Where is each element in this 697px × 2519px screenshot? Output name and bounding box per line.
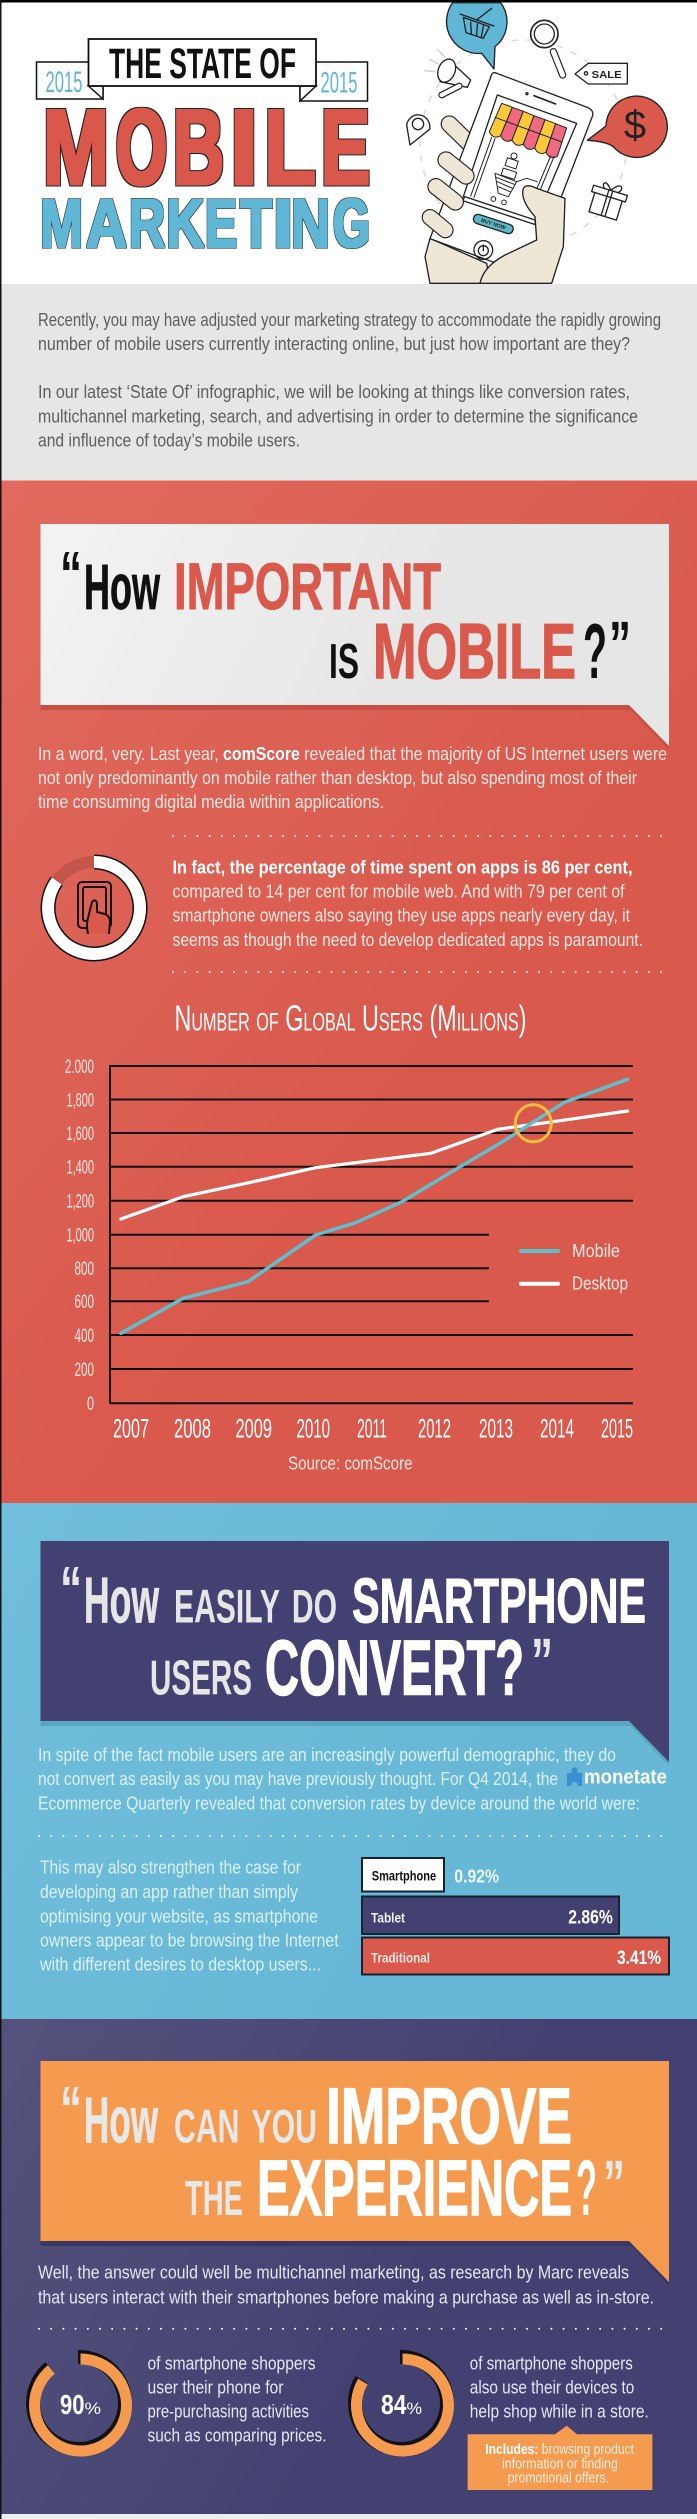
text: app case paragraph: developing an app rather than simply xyxy=(40,1882,298,1902)
illustration: hand holding phone with shopping icons xyxy=(407,3,667,283)
icon: gift box xyxy=(586,179,629,221)
title: Mobile: B xyxy=(173,87,224,207)
title: Mobile: L xyxy=(264,87,316,207)
panel: intro xyxy=(0,284,697,480)
heading card: how important is mobile xyxy=(40,524,669,750)
heading card: improve the experience: How xyxy=(84,2084,158,2157)
icon: dollar speech bubble xyxy=(587,96,667,157)
heading card: improve the experience: ” xyxy=(603,2147,625,2219)
title ribbon: 2015 xyxy=(46,66,82,99)
stat ring: 90% xyxy=(33,2357,127,2451)
text: multichannel paragraph: Well, the answer could well be multichannel marketing, as research by Marc reveals xyxy=(38,2263,629,2283)
logo: monetate: monetate xyxy=(584,1766,667,1788)
y axis labels: 1,600 xyxy=(66,1124,94,1145)
title: Mobile: M xyxy=(43,87,109,207)
icon: megaphone xyxy=(425,49,471,95)
panel: how important is mobile xyxy=(0,480,697,1503)
heading card: smartphone users convert: USERS xyxy=(150,1652,252,1706)
x axis labels: 2008 xyxy=(174,1414,211,1444)
bar: traditional: 3.41% xyxy=(617,1948,661,1969)
line chart: global users xyxy=(65,1057,633,1474)
x axis labels: 2010 xyxy=(296,1414,330,1444)
title: Marketing: M xyxy=(40,185,83,262)
y axis labels: 1,200 xyxy=(66,1192,94,1212)
title: Marketing: K xyxy=(166,185,204,262)
bar: smartphone xyxy=(362,1858,499,1892)
title: Marketing: A xyxy=(86,185,127,262)
legend xyxy=(521,1241,628,1294)
text: 90% description: pre-purchasing activities xyxy=(148,2401,309,2421)
bar: smartphone: Smartphone xyxy=(372,1868,436,1884)
heading card: improve the experience: “ xyxy=(60,2073,82,2145)
heading card: smartphone users convert xyxy=(40,1541,669,1766)
text: 84% description: of smartphone shoppers xyxy=(470,2353,633,2373)
text: intro paragraph 2 xyxy=(38,382,638,450)
y axis labels: 400 xyxy=(74,1326,94,1347)
text: 90% description: such as comparing prices. xyxy=(148,2426,326,2446)
text: 90% description xyxy=(148,2353,326,2446)
callout: includes xyxy=(468,2426,652,2490)
text: app case paragraph: with different desires to desktop users... xyxy=(39,1955,321,1975)
illustration: phone xyxy=(430,73,593,276)
text: conversion paragraph: not convert as easily as you may have previously thought. For Q4 2014, the xyxy=(38,1769,558,1789)
icon: shopping cart with gifts xyxy=(491,153,537,205)
heading card: smartphone users convert: CONVERT? xyxy=(265,1624,524,1712)
text: comScore paragraph: In a word, very. Last year, comScore revealed that the majority of US Internet users were xyxy=(38,744,667,764)
stat ring: 84%: 84% xyxy=(381,2389,422,2420)
text: intro paragraph 1: number of mobile users currently interacting online, but just how important are they? xyxy=(38,334,630,354)
heading card: smartphone users convert: ” xyxy=(531,1625,553,1697)
heading card: improve the experience: THE xyxy=(185,2172,243,2226)
title: Marketing: T xyxy=(240,185,272,262)
icon: sale tag xyxy=(575,63,627,84)
x axis labels: 2007 xyxy=(113,1414,149,1444)
hand: fingers xyxy=(430,160,466,230)
legend: Desktop xyxy=(572,1274,628,1294)
heading card: how important is mobile: ” xyxy=(609,608,631,680)
x axis labels: 2014 xyxy=(540,1414,574,1444)
callout: includes: Includes: browsing product xyxy=(485,2441,635,2458)
title: Marketing: I xyxy=(272,185,294,262)
icon: magnifier xyxy=(531,20,563,75)
callout: includes: information or finding xyxy=(502,2455,618,2472)
text: 84% description xyxy=(470,2353,649,2421)
hand: top finger xyxy=(449,124,467,142)
y axis labels: 600 xyxy=(74,1292,94,1313)
bar: tablet: Tablet xyxy=(371,1909,405,1925)
stat ring: 84% xyxy=(355,2357,449,2451)
text: 90% description: user their phone for xyxy=(148,2377,284,2397)
icon: map pin xyxy=(407,115,430,145)
title ribbon xyxy=(36,39,368,101)
text: 90% description: of smartphone shoppers xyxy=(148,2353,316,2373)
x axis labels: 2009 xyxy=(236,1414,272,1444)
y axis labels: 1,400 xyxy=(66,1158,94,1178)
title: Marketing: N xyxy=(291,185,330,262)
bar: tablet xyxy=(362,1896,619,1934)
series: mobile xyxy=(121,1079,628,1333)
heading card: improve the experience: IMPROVE xyxy=(326,2071,572,2160)
y axis labels: 2.000 xyxy=(65,1057,94,1078)
title: Marketing: G xyxy=(333,185,370,262)
text: apps paragraph: smartphone owners also saying they use apps nearly every day, it xyxy=(172,906,630,926)
icon: shop awning xyxy=(489,103,567,158)
icon: sale tag: SALE xyxy=(592,70,622,81)
text: intro paragraph 2: and influence of today’s mobile users. xyxy=(38,430,300,450)
bar chart: conversion rates by device xyxy=(362,1858,669,1974)
text: app case paragraph xyxy=(39,1858,339,1975)
button: buy now: BUY NOW xyxy=(480,218,507,232)
x axis labels: 2013 xyxy=(479,1414,513,1444)
y axis labels: 800 xyxy=(74,1259,94,1280)
heading card: smartphone users convert: How xyxy=(84,1564,159,1636)
bar: traditional xyxy=(362,1938,669,1974)
y axis labels: 0 xyxy=(87,1394,94,1415)
text: app case paragraph: optimising your website, as smartphone xyxy=(40,1907,318,1927)
heading card: improve the experience: ? xyxy=(576,2143,597,2232)
button: buy now xyxy=(472,213,514,235)
title ribbon: 2015 xyxy=(320,66,358,100)
heading card: improve the experience xyxy=(40,2061,669,2286)
text: apps paragraph xyxy=(172,858,643,950)
heading card: smartphone users convert: “ xyxy=(60,1553,82,1625)
callout: includes: promotional offers. xyxy=(508,2470,609,2487)
icon: basket speech bubble xyxy=(447,3,507,69)
hand: palm xyxy=(425,238,490,283)
title: Mobile: E xyxy=(321,87,370,207)
icon: ring with hand tapping tablet xyxy=(48,862,140,954)
x axis labels: 2012 xyxy=(418,1414,451,1444)
heading card: how important is mobile: How xyxy=(84,551,160,623)
source: Source: comScore xyxy=(288,1454,412,1474)
y axis labels xyxy=(65,1057,94,1415)
title: Marketing: R xyxy=(129,185,165,262)
text: app case paragraph: owners appear to be browsing the Internet xyxy=(40,1930,339,1950)
icon: power button xyxy=(474,241,493,259)
heading card: how important is mobile: IS xyxy=(329,635,359,689)
series: desktop xyxy=(121,1111,628,1219)
title: Marketing: E xyxy=(205,185,237,262)
crossover marker xyxy=(515,1105,551,1142)
text: apps paragraph: compared to 14 per cent for mobile web. And with 79 per cent of xyxy=(172,882,625,902)
text: conversion paragraph xyxy=(38,1745,640,1814)
title: Mobile: O xyxy=(116,87,167,207)
text: app case paragraph: This may also strengthen the case for xyxy=(40,1858,301,1878)
text: 84% description: also use their devices to xyxy=(470,2377,634,2397)
text: multichannel paragraph xyxy=(38,2263,654,2307)
y axis labels: 200 xyxy=(74,1360,94,1381)
x axis labels: 2011 xyxy=(357,1414,387,1444)
title: Mobile: I xyxy=(229,87,259,207)
panel: how can you improve the experience xyxy=(0,2019,697,2519)
panel: how easily do smartphone users convert xyxy=(0,1503,697,2019)
text: conversion paragraph: In spite of the fact mobile users are an increasingly powerful demographic, they do xyxy=(38,1745,616,1765)
text: intro paragraph 1 xyxy=(38,310,661,354)
bar: traditional: Traditional xyxy=(371,1949,430,1965)
heading card: how important is mobile: MOBILE xyxy=(373,607,576,695)
heading card: how important is mobile: “ xyxy=(60,538,82,610)
text: intro paragraph 2: In our latest ‘State Of’ infographic, we will be looking at things like conversion rates, xyxy=(38,382,630,402)
text: comScore paragraph: time consuming digital media within applications. xyxy=(38,792,384,812)
bar: tablet: 2.86% xyxy=(568,1907,613,1928)
legend: Mobile xyxy=(572,1241,620,1261)
heading card: smartphone users convert: easily do xyxy=(174,1562,337,1638)
heading card: how important is mobile: ? xyxy=(583,607,607,695)
title ribbon: THE STATE OF xyxy=(109,40,296,88)
text: comScore paragraph xyxy=(38,744,667,812)
bar: smartphone: 0.92% xyxy=(454,1867,499,1887)
y axis labels: 1,000 xyxy=(66,1226,94,1246)
icon: dollar speech bubble: $ xyxy=(624,103,646,147)
y axis labels: 1,800 xyxy=(66,1090,94,1112)
x axis labels: 2015 xyxy=(601,1414,633,1444)
x axis labels xyxy=(113,1414,633,1444)
heading card: how important is mobile: IMPORTANT xyxy=(174,549,441,623)
hand: thumb and palm xyxy=(480,186,565,283)
text: 84% description: help shop while in a store. xyxy=(470,2401,649,2421)
heading card: improve the experience: can you xyxy=(174,2083,317,2158)
panel: page header xyxy=(0,0,697,284)
text: apps paragraph: In fact, the percentage of time spent on apps is 86 per cent, xyxy=(172,858,632,878)
stat ring: 90%: 90% xyxy=(60,2389,101,2420)
